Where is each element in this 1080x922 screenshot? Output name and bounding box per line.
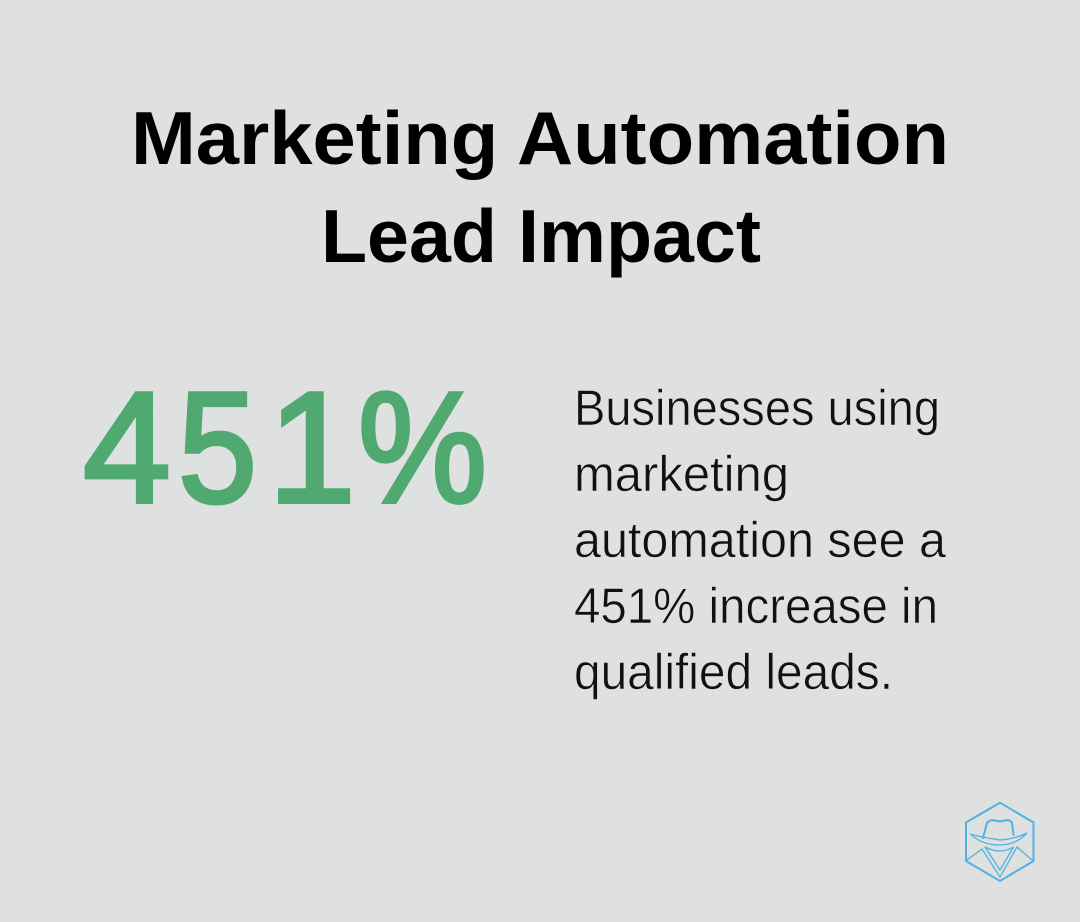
description text [574, 380, 946, 700]
big stat: 451%: 5 [178, 360, 257, 536]
big stat: 451% [83, 360, 487, 536]
description text: marketing [574, 446, 789, 502]
title: Marketing Automation [131, 96, 949, 180]
description text: Businesses using [574, 380, 940, 436]
title [131, 96, 949, 278]
big stat: 451%: 4 [83, 360, 171, 536]
description text: automation see a [574, 512, 946, 568]
big stat: 451%: 1 [268, 360, 356, 536]
title: Lead Impact [321, 194, 761, 278]
description text: qualified leads. [574, 644, 893, 700]
big stat: 451%: % [358, 360, 487, 536]
icon: hexagon logo with hat [966, 803, 1034, 881]
description text: 451% increase in [574, 578, 938, 634]
